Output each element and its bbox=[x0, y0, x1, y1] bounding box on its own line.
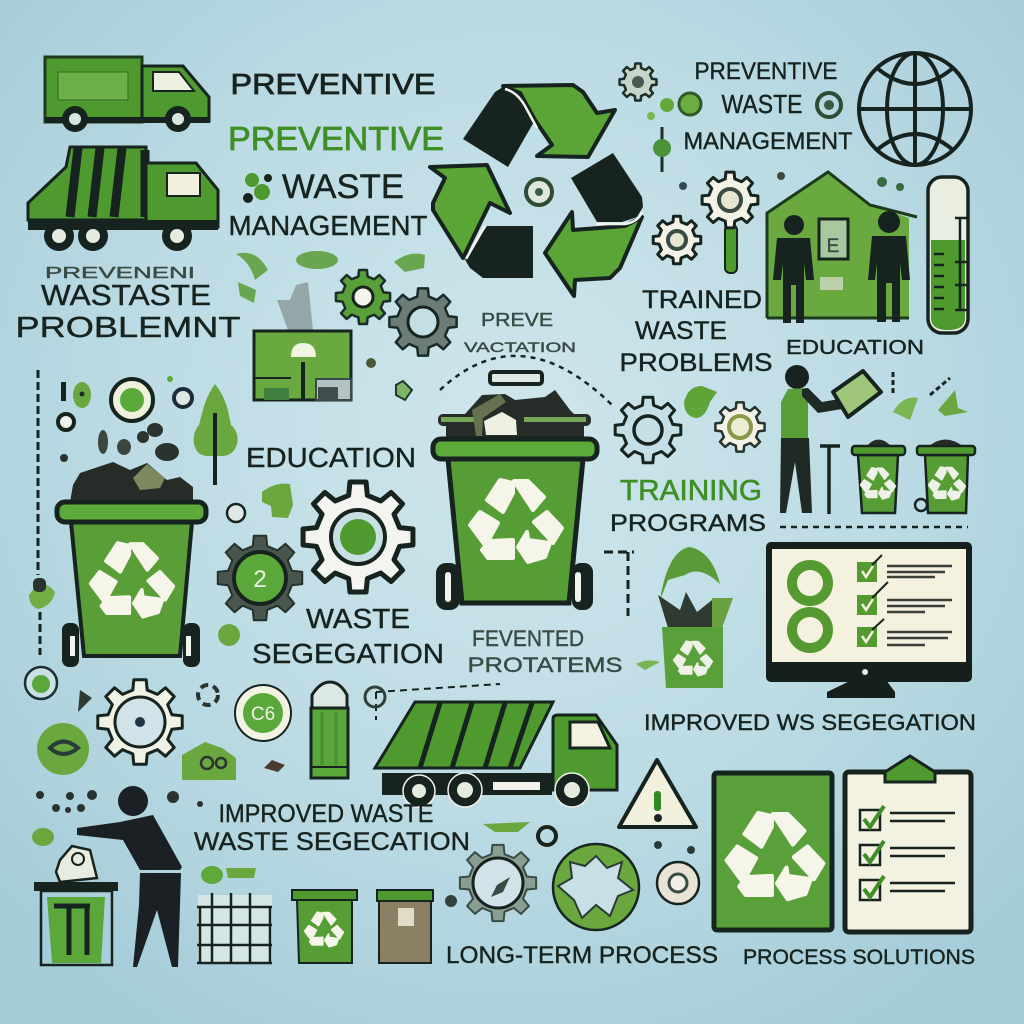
icon: small delivery truck bbox=[45, 57, 210, 132]
icon: battery cylinder bbox=[311, 682, 385, 778]
text: prevented programs: PROTATEMS bbox=[468, 654, 622, 677]
text: education: EDUCATION bbox=[246, 442, 416, 473]
icon: green building bbox=[254, 331, 351, 400]
dashed line left bbox=[38, 370, 40, 655]
text: small prevention arc label bbox=[440, 310, 612, 405]
text: training programs bbox=[610, 475, 766, 537]
icon: bottom left gears and badges: C6 bbox=[251, 704, 275, 725]
icon: small green bin bbox=[292, 890, 357, 963]
label: waste problem: PREVENENI bbox=[45, 265, 195, 282]
text: improved waste segregation bbox=[194, 800, 470, 856]
icon: large white gear bbox=[303, 482, 413, 592]
text: trained waste problems: WASTE bbox=[635, 317, 727, 345]
text: improved waste segregation right: IMPROVED WS SEGEGATION bbox=[644, 710, 976, 735]
text: long-term process: LONG-TERM PROCESS bbox=[446, 942, 718, 969]
icon: grid fence bbox=[197, 866, 272, 963]
icon: striped dump truck bbox=[28, 147, 218, 251]
text: training programs: PROGRAMS bbox=[610, 510, 766, 537]
icon: green leaf scatter bbox=[243, 173, 272, 203]
text: process solutions: PROCESS SOLUTIONS bbox=[743, 946, 975, 969]
text: top right preventive waste management bbox=[684, 58, 853, 155]
icon: globe bbox=[859, 53, 971, 165]
text: education right: EDUCATION bbox=[786, 337, 924, 359]
text: trained waste problems: TRAINED bbox=[642, 286, 762, 314]
icon: main recycling symbol bbox=[430, 85, 643, 296]
text: waste segregation: SEGEGATION bbox=[252, 638, 444, 669]
text: small prevention arc label: VACTATION bbox=[464, 339, 576, 355]
heading: waste: WASTE bbox=[282, 168, 404, 206]
text: improved waste segregation: WASTE SEGECATION bbox=[194, 828, 470, 856]
text: prevented programs: FEVENTED bbox=[472, 626, 584, 651]
icon: monitor with checklist bbox=[766, 542, 972, 698]
icon: house with two figures bbox=[767, 172, 917, 323]
icon: dashed line leaf and ring bbox=[25, 578, 240, 699]
icon: central recycling bin bbox=[433, 372, 597, 610]
text: waste segregation: WASTE bbox=[306, 603, 410, 634]
label: waste problem bbox=[16, 265, 241, 344]
label: waste problem: PROBLEMNT bbox=[16, 312, 241, 344]
icon: gears center left bbox=[277, 270, 457, 400]
text: training programs: TRAINING bbox=[620, 475, 762, 507]
heading: green preventive: PREVENTIVE bbox=[228, 120, 444, 157]
dashed line middle bbox=[376, 684, 500, 720]
icon: circle badges and tree bbox=[58, 376, 238, 485]
heading: management: MANAGEMENT bbox=[228, 210, 428, 241]
icon: clipboard checklist bbox=[845, 756, 971, 932]
text: waste segregation bbox=[252, 603, 444, 669]
icon: house with two figures: E bbox=[827, 236, 839, 257]
scattered leaves row bbox=[236, 251, 425, 303]
icon: person tossing into bin bbox=[32, 786, 203, 967]
text: prevented programs bbox=[468, 626, 622, 677]
text: improved waste segregation: IMPROVED WASTE bbox=[218, 800, 434, 828]
icon: numbered dark gear: 2 bbox=[253, 566, 267, 593]
icon: left recycling bin bbox=[57, 462, 206, 667]
text: top right preventive waste management: WASTE bbox=[722, 89, 802, 119]
text: trained waste problems bbox=[620, 286, 772, 377]
icon: numbered dark gear bbox=[218, 484, 302, 620]
text: trained waste problems: PROBLEMS bbox=[620, 349, 772, 377]
heading: preventive: PREVENTIVE bbox=[230, 69, 436, 101]
icon: pair of bins bbox=[852, 440, 975, 513]
icon: garbage truck bottom bbox=[375, 702, 617, 807]
icon: gear and pin bbox=[653, 172, 758, 273]
text: top right preventive waste management: PREVENTIVE bbox=[694, 58, 838, 85]
icon: green recycling tablet bbox=[714, 773, 832, 930]
icon: small bin with plants bbox=[604, 547, 733, 688]
icon: bottom gears and circular recycling bbox=[445, 822, 699, 930]
icon: small gears top bbox=[620, 64, 904, 191]
icon: gears center right bbox=[615, 386, 765, 463]
icon: warning triangle bbox=[619, 760, 696, 827]
label: waste problem: WASTASTE bbox=[41, 280, 211, 312]
icon: bottom left gears and badges bbox=[37, 680, 291, 780]
icon: thermometer gauge bbox=[928, 177, 968, 333]
icon: small brown bin bbox=[377, 890, 433, 963]
text: small prevention arc label: PREVE bbox=[481, 310, 553, 330]
icon: person with sign bbox=[780, 365, 968, 527]
text: top right preventive waste management: MANAGEMENT bbox=[684, 128, 853, 155]
